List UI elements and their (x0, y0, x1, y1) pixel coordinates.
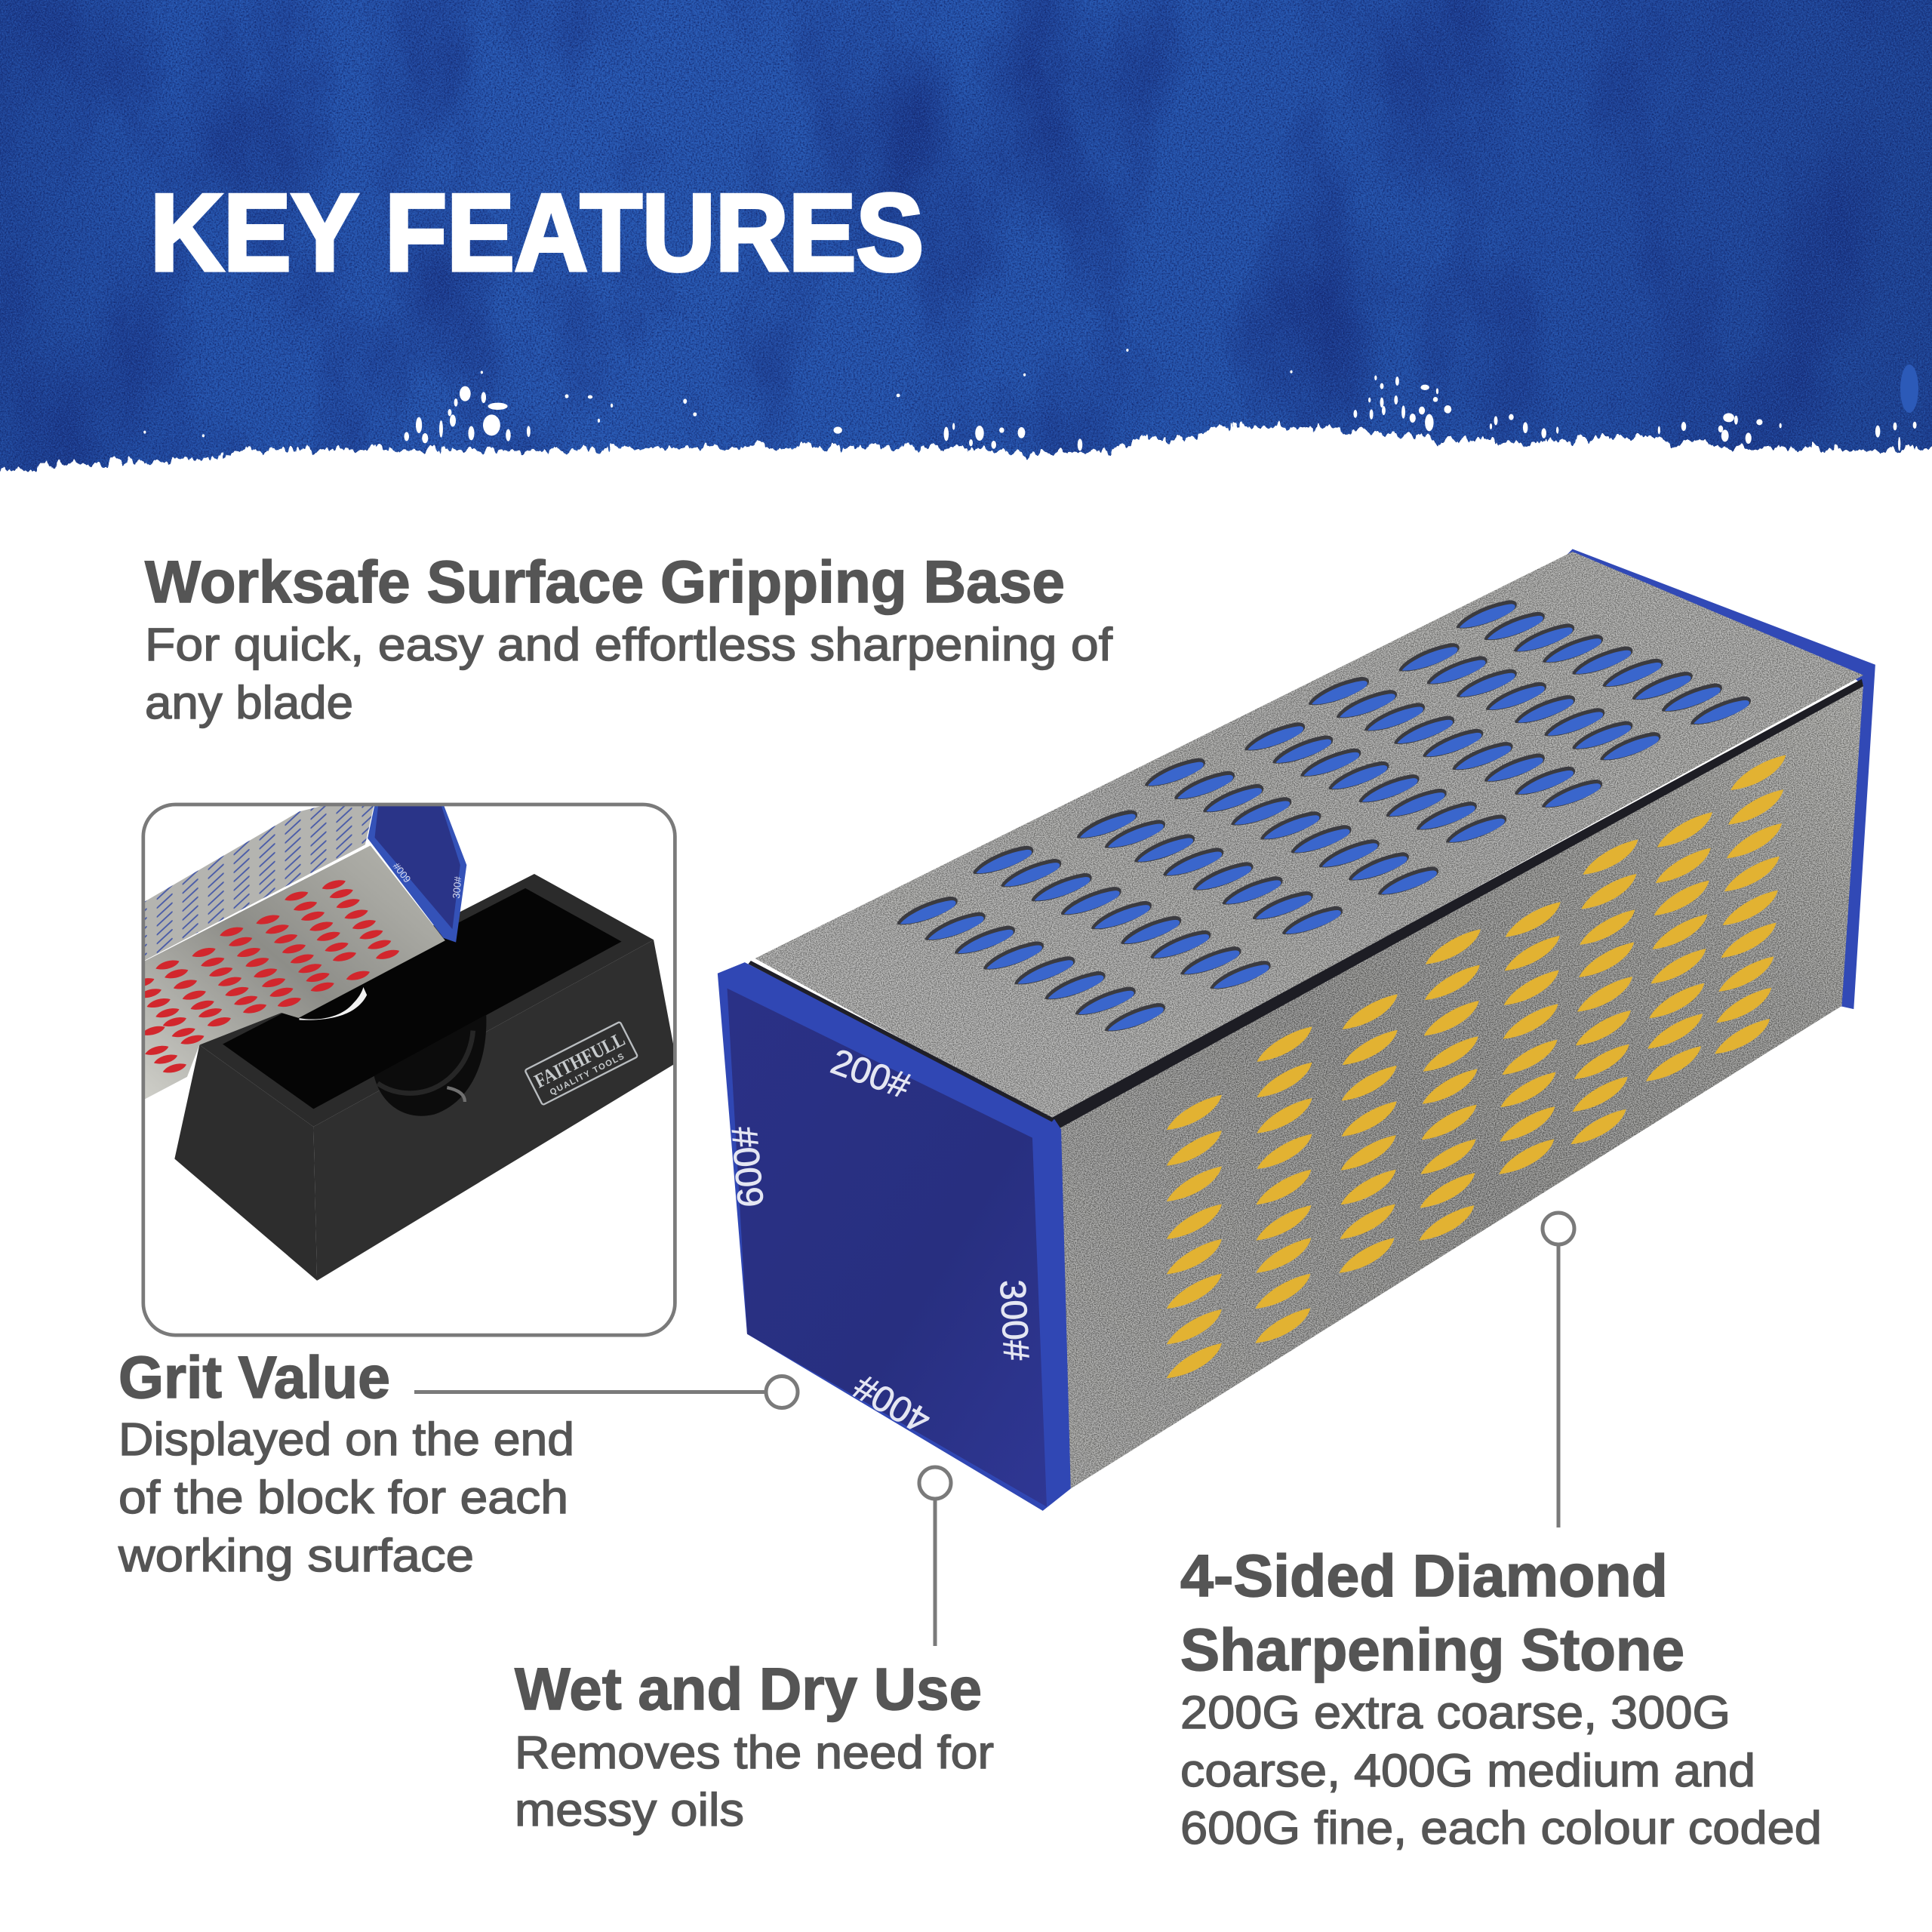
inset: Faithfull logo plate: FAITHFULL (531, 1027, 629, 1092)
feature: Grit Value: working surface (118, 1530, 474, 1581)
inset stone: side face with red slots (131, 844, 445, 1100)
title: KEY FEATURES (150, 171, 924, 294)
feature: Grit Value: Grit Value (118, 1343, 390, 1411)
feature: 4-Sided Diamond Sharpening Stone: coarse, 400G medium and (1180, 1745, 1755, 1796)
feature: 4-Sided Diamond Sharpening Stone: 200G extra coarse, 300G (1180, 1687, 1730, 1738)
inset stone: top face (143, 804, 374, 961)
feature: 4-Sided Diamond Sharpening Stone (1180, 1542, 1822, 1854)
feature: Wet and Dry Use (515, 1655, 994, 1835)
stone: end face (718, 962, 1071, 1511)
grit markings on end face: 600# (724, 1125, 772, 1209)
stone: top diamond face (755, 552, 1863, 1121)
main product: 4-sided diamond sharpening stone (718, 549, 1875, 1511)
feature: Wet and Dry Use: Removes the need for (515, 1727, 994, 1778)
inset stone: blue end face: 300# (451, 875, 463, 899)
grit markings on end face: 400# (847, 1366, 937, 1441)
feature: Worksafe Surface Gripping Base: any blade (145, 677, 353, 728)
stone: back end blue edge (1566, 549, 1875, 1009)
feature: Wet and Dry Use: Wet and Dry Use (515, 1655, 982, 1722)
grit markings on end face: 200# (826, 1041, 915, 1107)
yellow slots: side face (1167, 755, 1786, 1378)
stone: side diamond face (1055, 685, 1863, 1489)
blue slots: top face (897, 600, 1751, 1031)
inset: Faithfull logo plate: QUALITY TOOLS (549, 1052, 626, 1097)
grit markings on end face: 300# (992, 1278, 1036, 1361)
feature: 4-Sided Diamond Sharpening Stone: Sharpening Stone (1180, 1616, 1684, 1683)
inset: black rubber base (174, 874, 677, 1281)
panel: inset photo of stone lifting from black base (131, 804, 677, 1335)
feature: Worksafe Surface Gripping Base (145, 548, 1113, 728)
callout: 4-Sided leader (1543, 1213, 1574, 1527)
grit markings on end face (724, 1041, 1036, 1441)
feature: Worksafe Surface Gripping Base: For quick, easy and effortless sharpening of (145, 619, 1113, 670)
feature: Grit Value: of the block for each (118, 1472, 568, 1523)
inset: light showing through rear notch (300, 987, 367, 1020)
callout: Wet and Dry leader (919, 1467, 951, 1646)
callout: Grit Value leader (414, 1377, 798, 1408)
inset stone: blue end face: 600# (390, 860, 414, 884)
feature: Worksafe Surface Gripping Base: Worksafe Surface Gripping Base (145, 548, 1065, 615)
feature: 4-Sided Diamond Sharpening Stone: 600G fine, each colour coded (1180, 1802, 1822, 1854)
feature: 4-Sided Diamond Sharpening Stone: 4-Sided Diamond (1180, 1542, 1668, 1609)
header: blue painted banner (0, 0, 1932, 528)
feature: Grit Value: Displayed on the end (118, 1414, 574, 1465)
inset stone: blue end face (368, 804, 466, 943)
feature: Wet and Dry Use: messy oils (515, 1784, 744, 1835)
stone: black seam (1051, 679, 1863, 1129)
feature: Grit Value (118, 1343, 574, 1581)
